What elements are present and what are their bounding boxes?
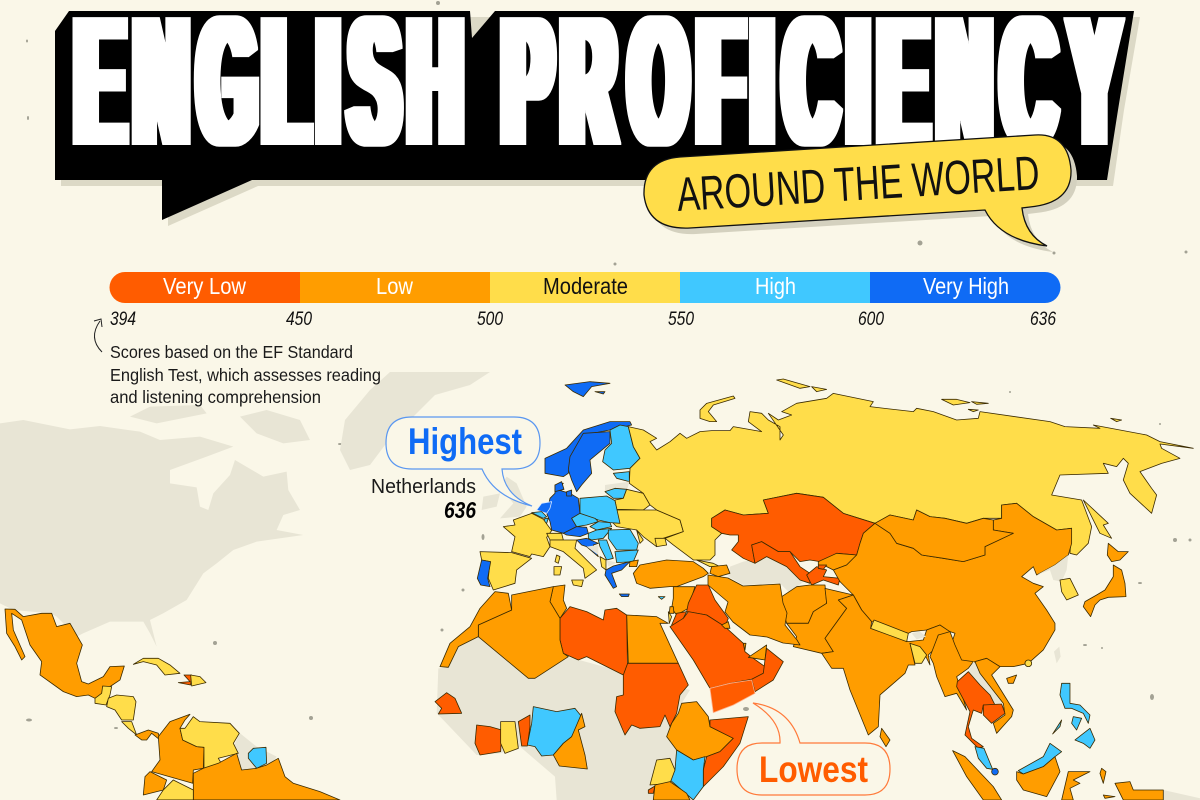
map: Middle East and Africa countries xyxy=(435,585,783,800)
legend score ticks: 450 xyxy=(286,309,312,330)
legend score ticks: 600 xyxy=(858,309,884,330)
legend score ticks: 394 xyxy=(110,309,136,330)
legend score ticks: 636 xyxy=(1030,309,1056,330)
bubble shadow xyxy=(650,141,1077,252)
subtitle text: AROUND THE WORLD xyxy=(675,147,1041,222)
note text: and listening comprehension xyxy=(110,387,321,407)
legend score ticks: 500 xyxy=(477,309,503,330)
legend labels: Very Low xyxy=(163,273,246,299)
callout bubble xyxy=(386,417,540,506)
legend labels: Moderate xyxy=(543,273,628,299)
note text: English Test, which assesses reading xyxy=(110,365,381,385)
title banner xyxy=(55,0,1140,226)
callout: highest xyxy=(371,417,540,523)
callout heading: Lowest xyxy=(759,749,868,790)
legend labels: High xyxy=(755,273,796,299)
icon: note arrow xyxy=(94,319,102,352)
note text: Scores based on the EF Standard xyxy=(110,342,353,362)
map background: grey land without data xyxy=(0,372,1200,800)
map: Turkey and Caucasus xyxy=(633,560,730,588)
map: South and Southeast Asia xyxy=(782,585,1163,800)
callout: lowest xyxy=(737,703,890,795)
legend: score scale xyxy=(110,272,1060,330)
legend labels: Low xyxy=(376,273,413,299)
legend score ticks: 550 xyxy=(668,309,694,330)
map: Europe countries xyxy=(477,382,683,599)
bubble shape xyxy=(644,135,1071,246)
map: Americas countries xyxy=(5,609,340,800)
banner black speech shape xyxy=(55,11,1134,220)
legend labels xyxy=(163,273,1009,299)
callout heading: Highest xyxy=(408,421,522,462)
map: Russia, Central and East Asia xyxy=(628,379,1193,667)
subtitle speech bubble xyxy=(644,135,1077,252)
title text: English Proficiency xyxy=(76,0,1119,183)
callout country: Netherlands xyxy=(371,476,476,498)
legend score ticks xyxy=(110,309,1056,330)
legend labels: Very High xyxy=(923,273,1009,299)
callout bubble xyxy=(737,703,890,795)
banner shadow xyxy=(61,17,1140,226)
map: Iran xyxy=(708,575,800,645)
callout score: 636 xyxy=(444,497,476,523)
note text xyxy=(110,342,381,407)
legend bar segments xyxy=(110,272,1060,303)
